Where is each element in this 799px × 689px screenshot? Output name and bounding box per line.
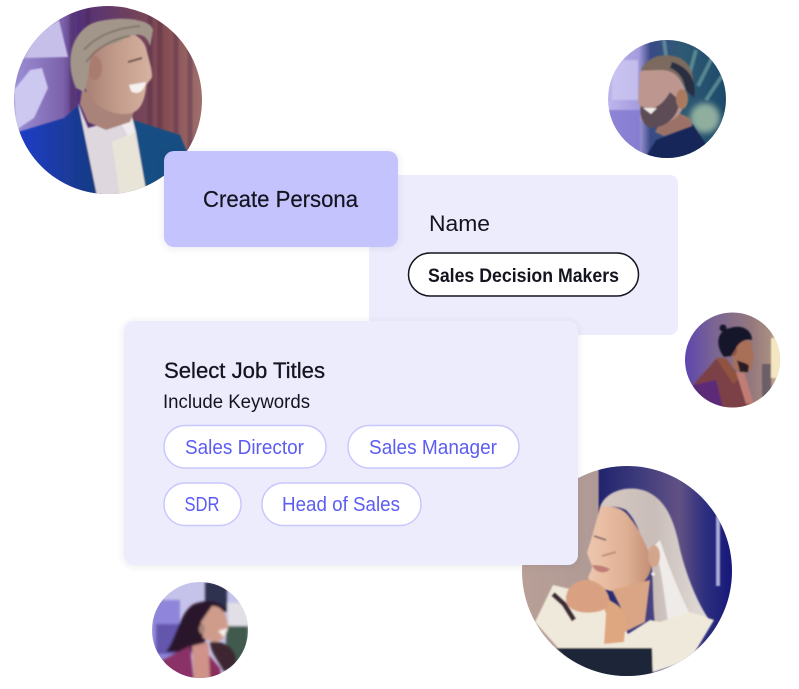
portrait: laughing woman in magenta jacket [152, 582, 248, 680]
tag: sales director [164, 426, 326, 468]
pill: sales decision makers [408, 253, 638, 296]
portrait: smiling man in blue blazer [14, 6, 202, 196]
portrait: man in rust coat [685, 312, 780, 412]
portrait: bearded man with teal background [608, 40, 726, 162]
tag: sales director: Sales Director [185, 437, 304, 459]
label: name: Name [429, 211, 490, 236]
tag: head of sales: Head of Sales [282, 494, 400, 516]
panel: create persona button [164, 151, 398, 247]
tag: sdr: SDR [184, 494, 220, 516]
pill: sales decision makers: Sales Decision Makers [428, 266, 619, 287]
subheading: include keywords: Include Keywords [163, 392, 310, 413]
portrait: older woman with white hair [522, 466, 732, 680]
panel: create persona button: Create Persona [203, 186, 358, 212]
tag: sales manager: Sales Manager [369, 437, 497, 459]
tag: head of sales [262, 483, 421, 526]
panel: select job titles [124, 321, 578, 565]
heading: select job titles: Select Job Titles [164, 358, 325, 383]
tag: sdr [164, 483, 241, 526]
tag: sales manager [348, 426, 519, 468]
panel: name [369, 175, 678, 335]
